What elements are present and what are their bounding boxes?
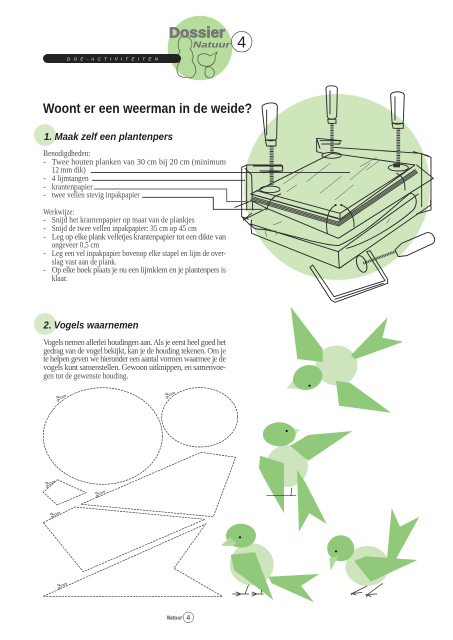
text block: werkwijze: Leg op elke plank velletjes krantenpapier tot een dikte van [52,232,226,241]
text block: benodigdheden: Twee houten planken van 30 cm bij 20 cm (minimum [52,157,227,166]
text block: vogels: Vogels nemen allerlei houdingen aan. Als je eerst heel goed het [43,338,227,347]
back clamp frame [317,138,431,214]
text block: vogels: te helpen geven we hieronder een aantal vormen waarmee je de [43,355,226,364]
logo: Dossier Natuur badge [168,16,232,80]
top board [251,153,415,219]
bird: standing, tail up [327,508,419,597]
text block: benodigdheden: - [43,191,46,200]
scissors marks [46,392,175,590]
icon: mascot squirrel and bird [177,36,217,78]
left clamp frame [242,165,283,225]
heading: section 2 [34,313,138,335]
text block: benodigdheden: - [43,182,46,191]
header bar: doe-activiteiten [43,54,181,63]
text block: werkwijze: ongeveer 0,5 cm [52,241,100,250]
heading: section 1: 1. Maak zelf een plantenpers [44,131,173,143]
footer page marker: Natuur [167,616,183,622]
loose clamp [310,251,388,302]
text block: benodigdheden: twee vellen stevig inpakpapier [52,191,140,200]
text: Natuur: Natuur [193,40,231,50]
text block: werkwijze: Werkwijze: [43,207,74,216]
title: Woont er een weerman in de weide? [43,101,252,116]
text block: vogels: gen tot de gewenste houding. [43,371,128,380]
paper stack [251,171,417,224]
text block: werkwijze: Leg een vel inpakpapier bovenop elke stapel en lijm de over- [52,249,226,258]
text block: vogels: vogels kunt samenstellen. Gewoon uitknippen, en samenvoe- [43,363,226,372]
cut-out shapes [43,388,238,596]
bird: perched, wing up [259,422,352,532]
heading: section 1 [34,124,173,146]
text block: benodigdheden [43,149,227,200]
text block: werkwijze [43,207,226,283]
text block: werkwijze: - [43,224,46,233]
rubber band arcs [327,205,354,233]
text block: benodigdheden: 4 lijmtangen [52,174,89,183]
handles and screws [253,103,283,193]
text: Dossier: Dossier [169,24,225,42]
lower board [251,194,431,268]
illustration: plant press [235,86,435,302]
text block: werkwijze: Snijd de twee vellen inpakpapier: 35 cm op 45 cm [52,224,197,233]
bird: flying [287,307,403,413]
text block: benodigdheden: krantenpapier [52,182,93,191]
text block: werkwijze: - [43,216,46,225]
text block: werkwijze: klaar. [52,274,68,283]
hatch lines [265,157,390,237]
header bar: doe-activiteiten: D O E - A C T I V I T E I T E N [67,57,159,62]
dossier number 4 [231,31,252,52]
text block: benodigdheden: - [43,157,46,166]
text block: werkwijze: - [43,266,46,275]
heading: section 2: 2. Vogels waarnemen [43,320,139,332]
text block: vogels [43,338,227,380]
dossier number 4: 4 [237,34,246,52]
text block: werkwijze: - [43,249,46,258]
text block: werkwijze: slag vast aan de plank. [52,257,117,266]
text block: werkwijze: Snijd het krantenpapier op maat van de plankjes [52,216,195,225]
lower paper pad [251,193,416,248]
text block: werkwijze: - [43,232,46,241]
text block: werkwijze: Op elke hoek plaats je nu een lijmklem en je plantenpers is [52,266,226,275]
text block: vogels: gedrag van de vogel bekijkt, kan je de houding tekenen. Om je [43,346,226,355]
bird: standing, tail right [221,524,319,602]
text block: benodigdheden: Benodigdheden: [43,149,90,158]
leader lines [91,172,350,209]
footer page marker [167,612,194,623]
text block: benodigdheden: 12 mm dik) [52,166,86,175]
text block: benodigdheden: - [43,174,46,183]
footer page marker: 4 [186,615,190,622]
